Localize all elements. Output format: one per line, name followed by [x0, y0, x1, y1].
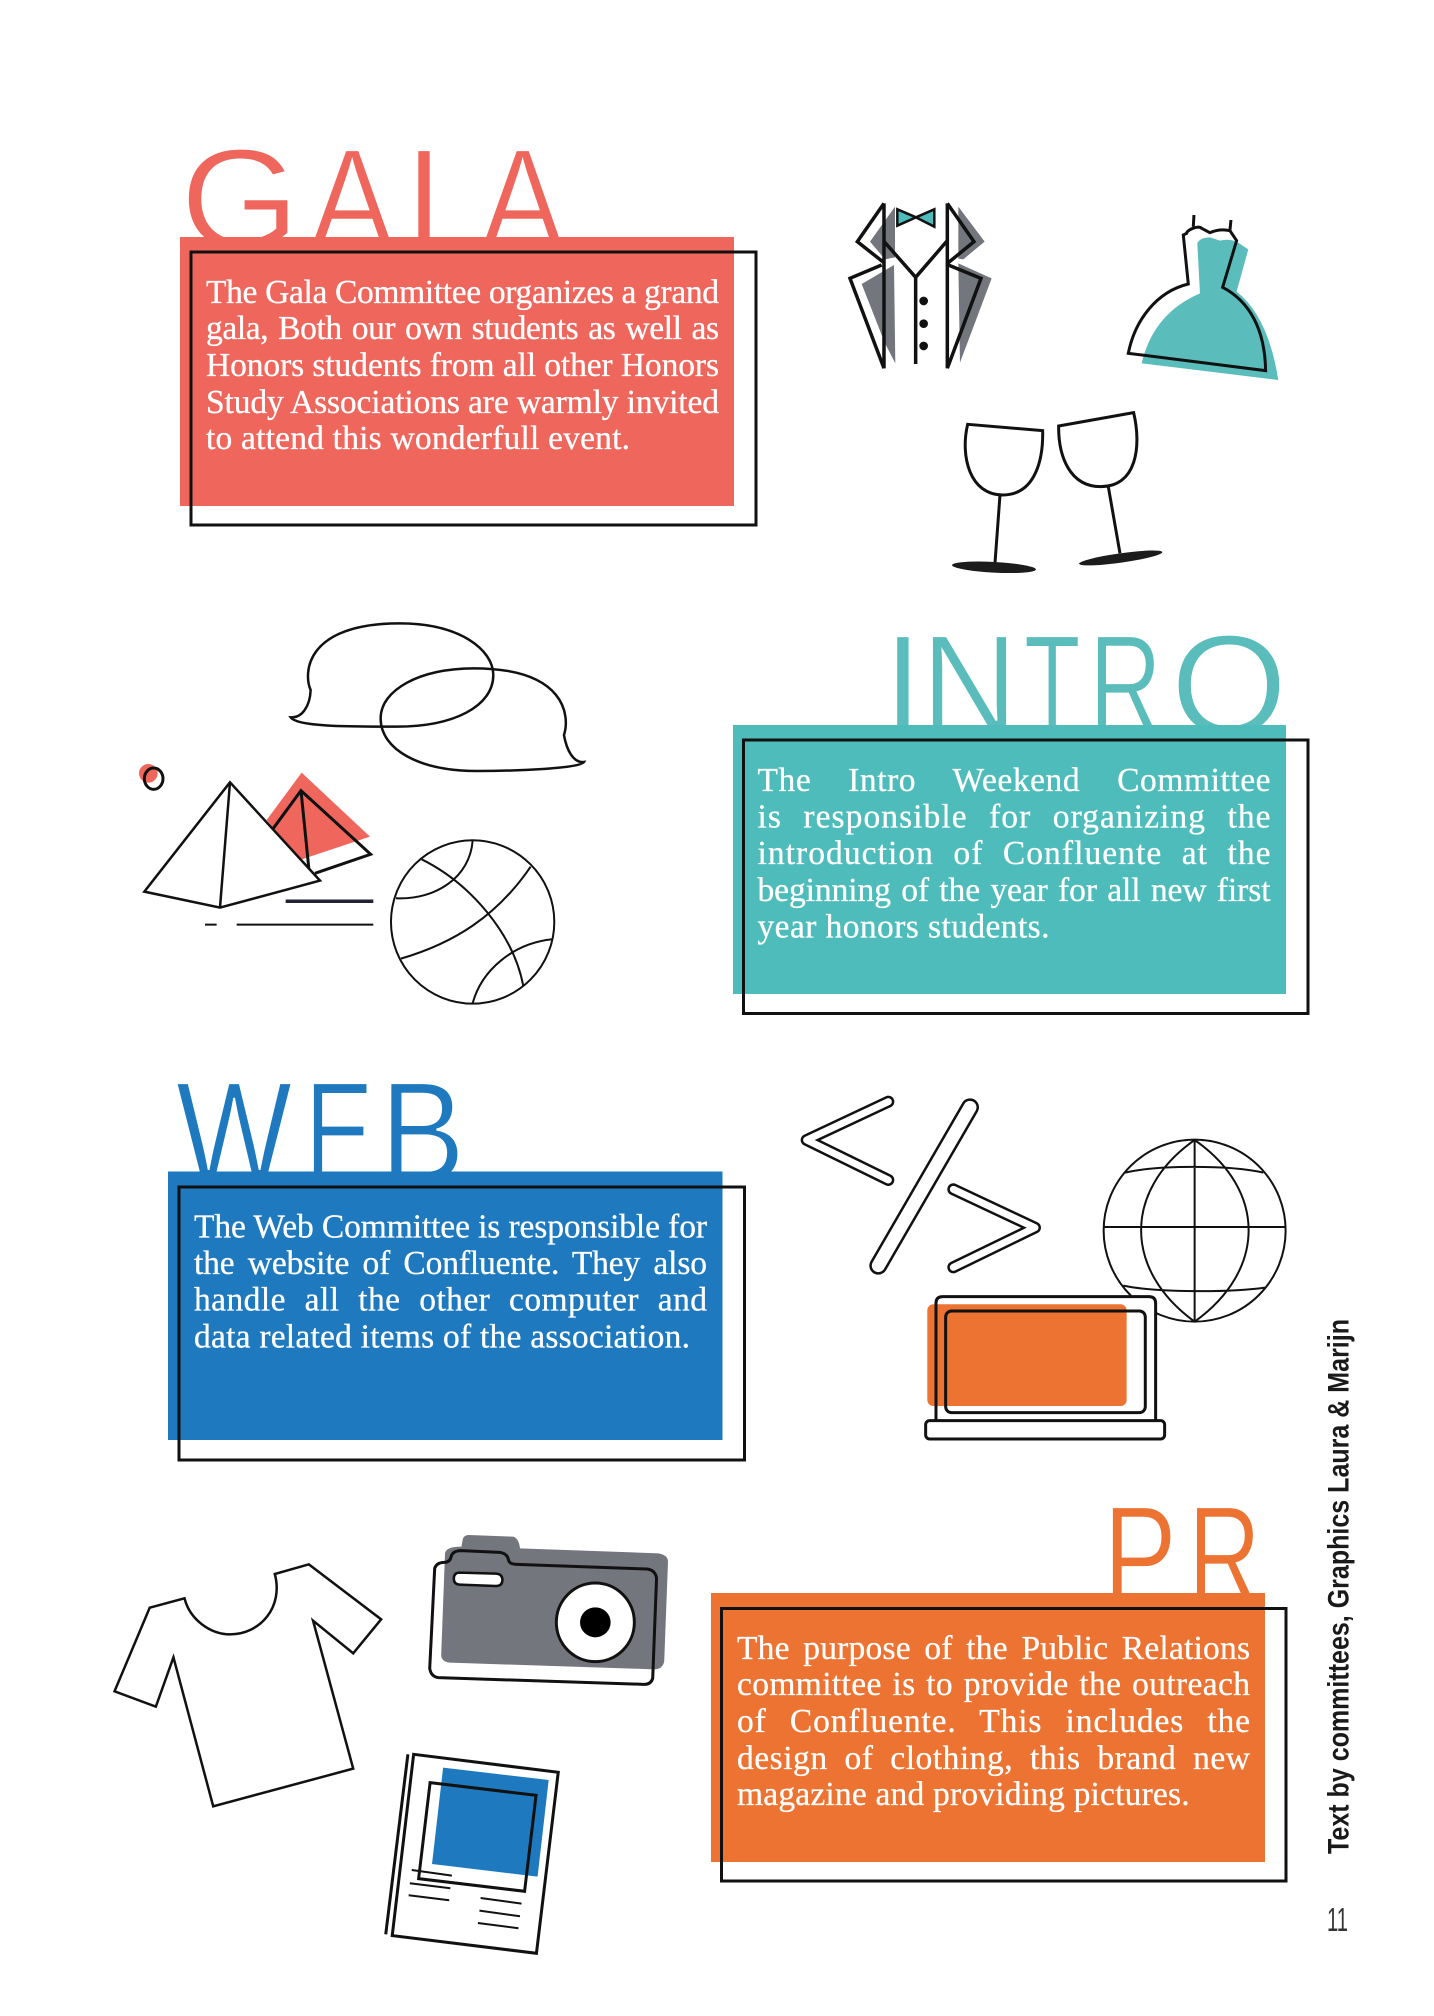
heading: WEB: [176, 1054, 465, 1212]
heading: INTRO: O: [1170, 606, 1288, 766]
heading: PR: P: [1103, 1478, 1177, 1636]
web colour box: [168, 1172, 722, 1440]
page number: 11: [1327, 1901, 1348, 1938]
gala colour box: [180, 237, 734, 506]
pr text block: committee is to provide the outreach: [737, 1666, 1250, 1703]
heading: GALA: G: [180, 120, 300, 280]
web text block: [194, 1208, 707, 1356]
icon: camera: [430, 1535, 668, 1684]
gala outline frame: [191, 252, 756, 525]
pr text block: [737, 1630, 1251, 1813]
icon: laptop: [926, 1297, 1165, 1439]
gala text block: Honors students from all other Honors: [206, 347, 719, 384]
heading: GALA: A: [481, 120, 565, 280]
heading: INTRO: N: [921, 606, 1018, 766]
heading: INTRO: I: [883, 606, 923, 766]
heading: INTRO: R: [1089, 606, 1162, 766]
heading: GALA: [180, 120, 565, 280]
heading: WEB: B: [380, 1054, 465, 1212]
icon: speech bubbles: [291, 623, 584, 771]
gala text block: [206, 274, 719, 457]
heading: PR: R: [1188, 1478, 1261, 1636]
web text block: handle all the other computer and: [194, 1282, 707, 1318]
icon: magazine: [386, 1754, 558, 1953]
web text block: data related items of the association.: [194, 1318, 690, 1356]
pr colour box: [711, 1593, 1265, 1862]
icon: wine glasses: [952, 413, 1163, 575]
intro outline frame: [744, 740, 1308, 1014]
icon: basketball: [391, 840, 554, 1004]
web text block: The Web Committee is responsible for: [194, 1208, 707, 1246]
panel: web: [168, 1054, 744, 1460]
heading: WEB: W: [176, 1054, 292, 1212]
pr text block: The purpose of the Public Relations: [737, 1630, 1250, 1667]
heading: GALA: L: [406, 120, 485, 280]
credit line: Text by committees, Graphics Laura & Marijn: [1322, 1319, 1356, 1854]
intro text block: [758, 762, 1271, 946]
intro text block: is responsible for organizing the: [758, 798, 1270, 836]
intro text block: year honors students.: [758, 908, 1050, 946]
gala text block: The Gala Committee organizes a grand: [206, 274, 719, 311]
web outline frame: [179, 1187, 744, 1460]
panel: intro: [733, 606, 1308, 1014]
icon: code brackets: [807, 1102, 1035, 1267]
heading: INTRO: T: [1024, 606, 1080, 766]
heading: WEB: E: [305, 1054, 374, 1212]
panel: gala: [180, 120, 756, 525]
intro text block: beginning of the year for all new first: [758, 872, 1271, 909]
pr text block: design of clothing, this brand new: [737, 1740, 1251, 1777]
pr text block: magazine and providing pictures.: [737, 1776, 1190, 1813]
pr outline frame: [722, 1608, 1286, 1881]
web text block: the website of Confluente. They also: [194, 1245, 707, 1282]
gala text block: gala, Both our own students as well as: [206, 310, 719, 347]
heading: INTRO: [883, 606, 1288, 766]
heading: GALA: A: [310, 120, 395, 280]
intro text block: The Intro Weekend Committee: [758, 762, 1270, 799]
icon: globe: [1104, 1140, 1286, 1322]
icon: tuxedo: [850, 203, 992, 368]
panel: pr: [711, 1478, 1286, 1881]
gala text block: Study Associations are warmly invited: [206, 384, 719, 421]
intro text block: introduction of Confluente at the: [758, 835, 1270, 872]
gala text block: to attend this wonderfull event.: [206, 420, 630, 457]
icon: dress: [1128, 215, 1278, 380]
icon: pyramids and sun: [139, 764, 373, 925]
heading: PR: [1103, 1478, 1261, 1636]
pr text block: of Confluente. This includes the: [737, 1703, 1250, 1740]
icon: t-shirt: [115, 1564, 381, 1806]
intro colour box: [733, 725, 1286, 994]
